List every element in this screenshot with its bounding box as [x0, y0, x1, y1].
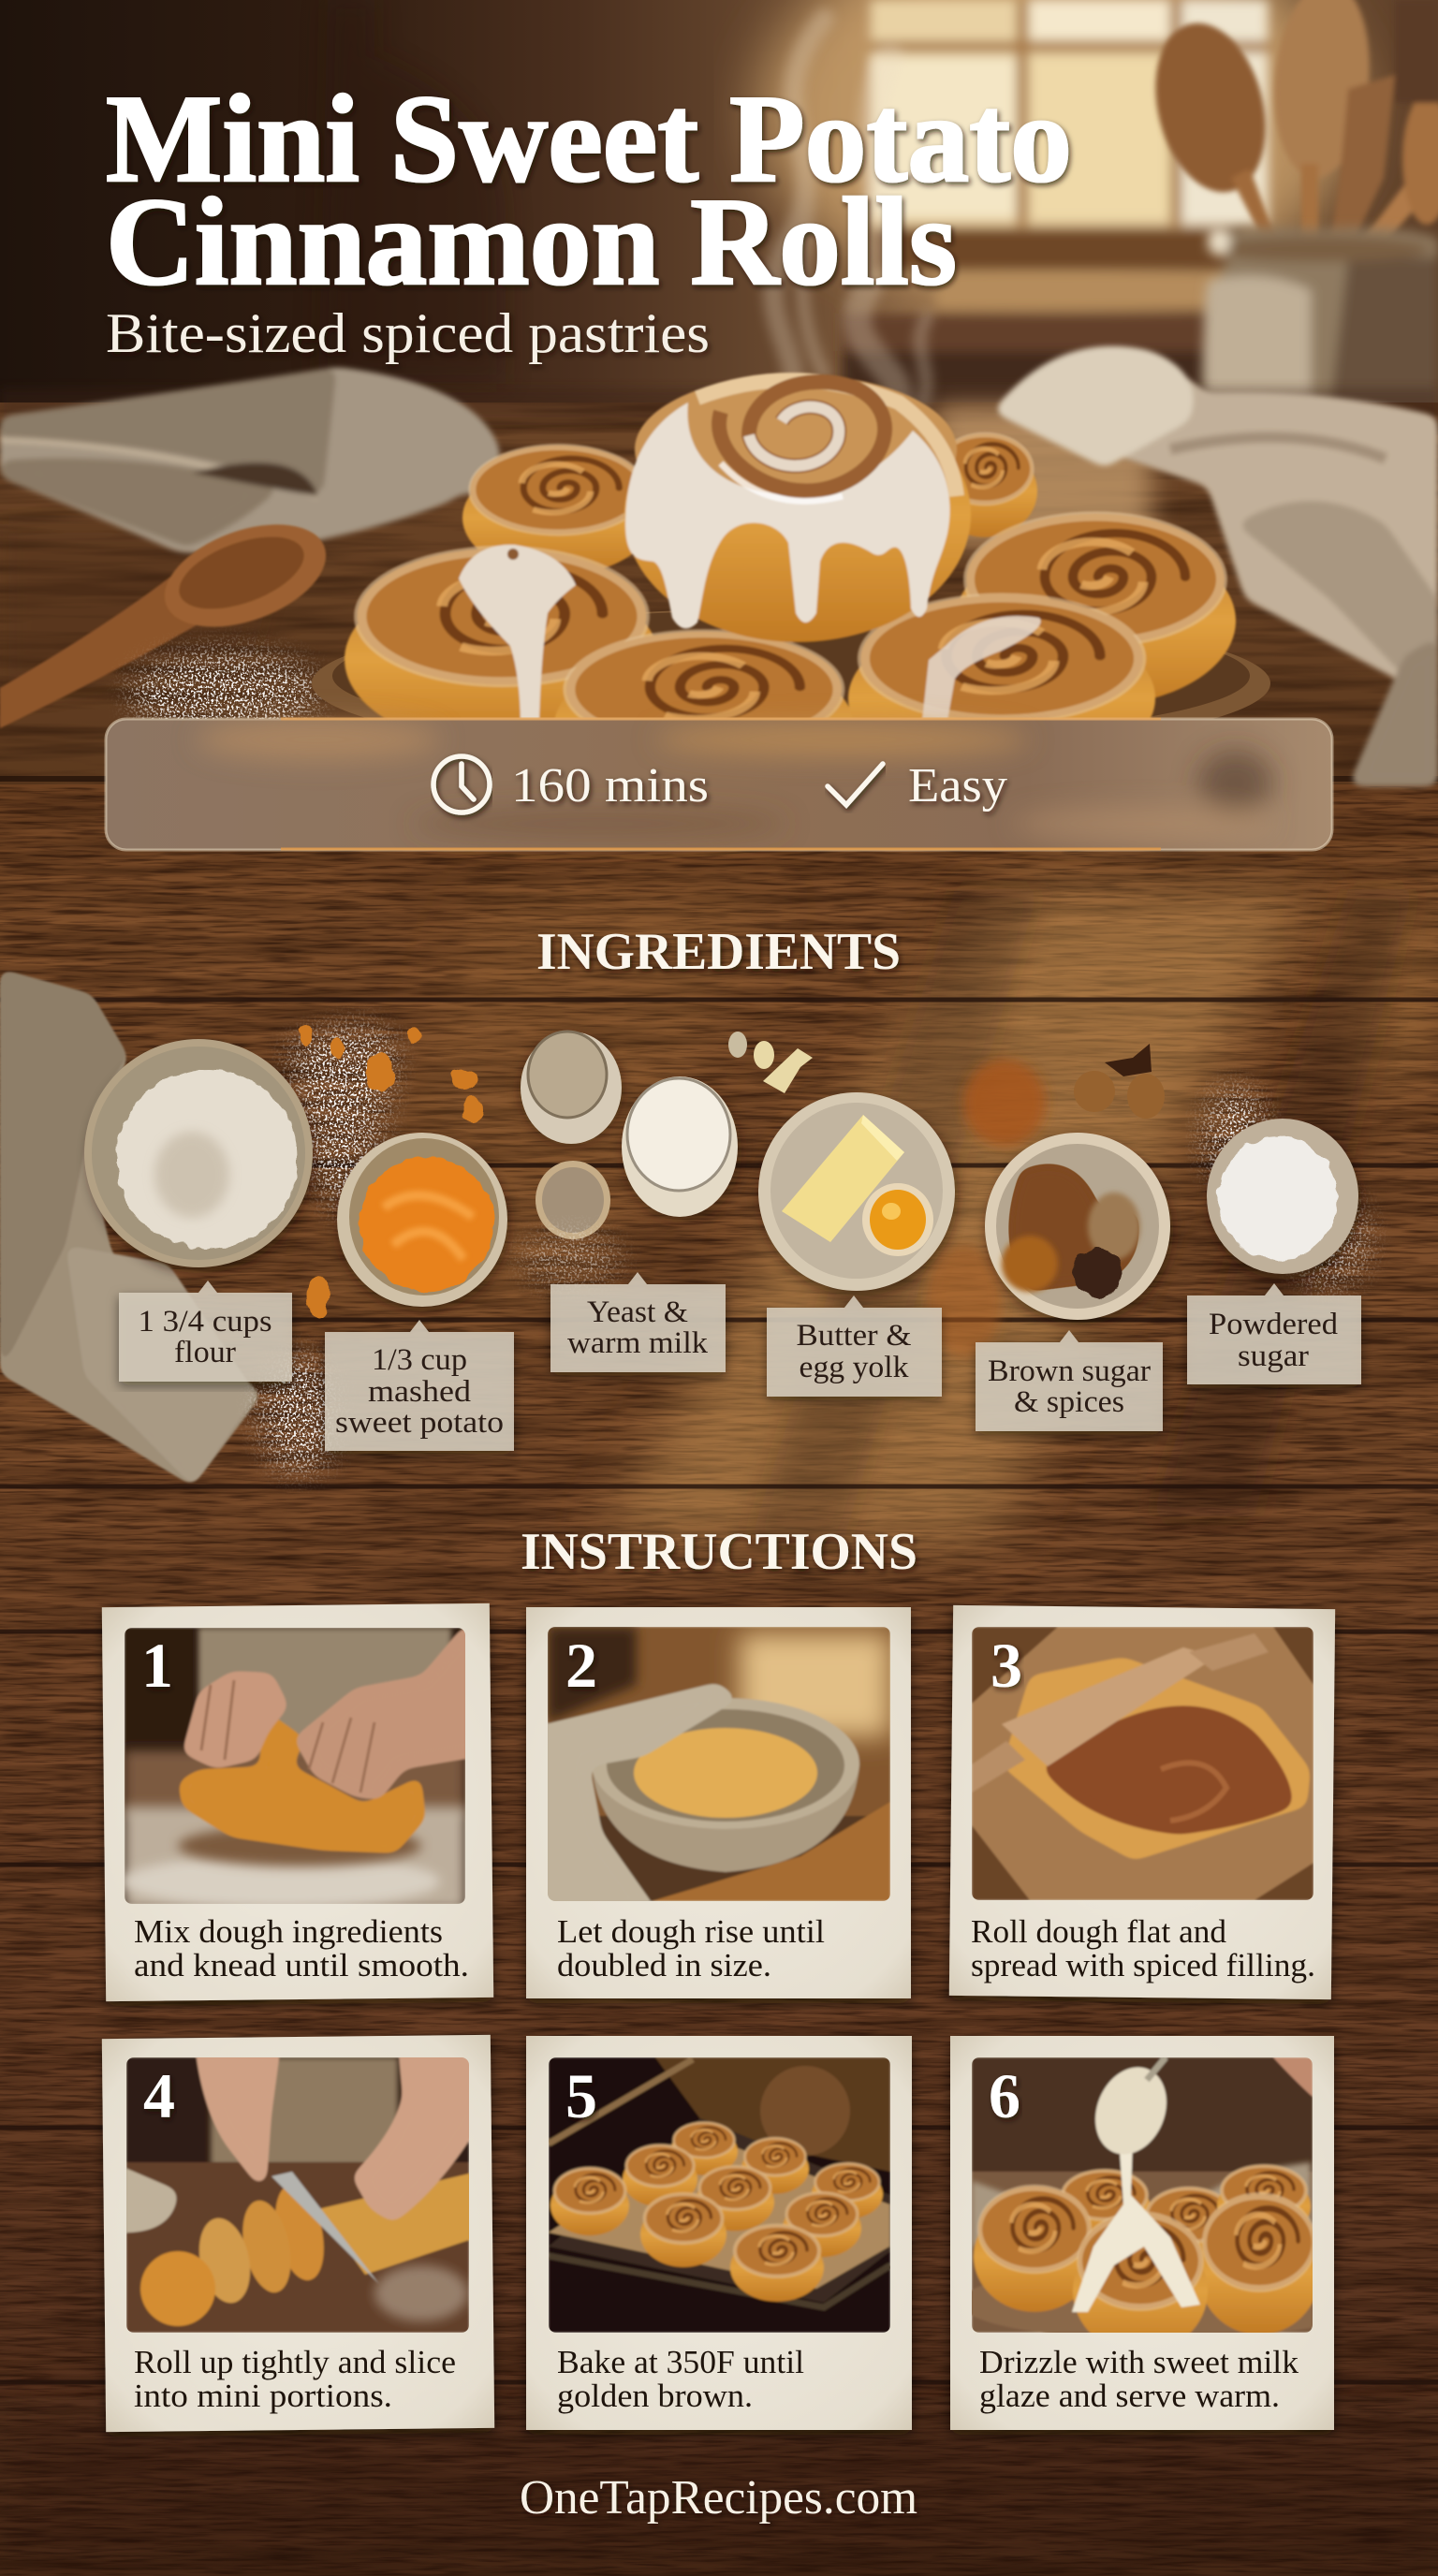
panel: ingredients	[0, 969, 1367, 1486]
linen towel	[0, 969, 262, 1486]
step text 6: glaze and serve warm.	[979, 2378, 1280, 2414]
heading: ingredients: INGREDIENTS	[536, 923, 901, 981]
step text 5: golden brown.	[557, 2378, 753, 2414]
label: powdered sugar: sugar	[1238, 1339, 1309, 1373]
bowl: flour	[84, 1039, 313, 1273]
step number 2: 2	[565, 1630, 597, 1701]
bowl: sweet potato	[337, 1133, 509, 1311]
step text 4: into mini portions.	[134, 2378, 392, 2414]
title	[106, 69, 1072, 311]
label: butter and egg: Butter &	[796, 1319, 912, 1353]
label: sweet potato	[325, 1320, 514, 1451]
step text 6	[979, 2344, 1299, 2414]
step text 2: doubled in size.	[557, 1947, 771, 1983]
jar: yeast	[519, 1032, 624, 1146]
hero backdrop wall	[0, 0, 1438, 431]
step 4 card	[102, 2035, 494, 2432]
step 6 card	[950, 2036, 1362, 2430]
back-right roll	[932, 433, 1037, 537]
front-left roll	[345, 545, 659, 748]
stoneware jar	[1201, 227, 1438, 412]
icon: check	[828, 764, 883, 805]
spilled flour	[262, 1030, 1367, 1470]
step number 3: 3	[990, 1630, 1022, 1701]
step text 4: Roll up tightly and slice	[134, 2344, 456, 2380]
back-left roll	[462, 446, 653, 576]
step text 5: Bake at 350F until	[557, 2344, 804, 2380]
panel: instructions	[102, 1603, 1362, 2432]
cinnamon dust	[963, 1060, 1046, 1146]
step number 4: 4	[143, 2060, 175, 2131]
label: sweet potato: 1/3 cup	[372, 1343, 467, 1377]
spice smear	[927, 1245, 1002, 1357]
labels	[119, 1272, 1361, 1451]
label: butter and egg: egg yolk	[800, 1351, 909, 1384]
cook time: 160 mins	[511, 759, 709, 812]
front-center roll	[554, 631, 854, 801]
label: yeast and milk: Yeast &	[587, 1295, 688, 1329]
step 1 card	[102, 1603, 493, 2001]
title: Cinnamon Rolls	[106, 172, 957, 311]
step text 1: Mix dough ingredients	[134, 1913, 443, 1950]
subtitle: Bite-sized spiced pastries	[106, 302, 710, 364]
label: sweet potato: mashed	[368, 1375, 472, 1409]
icon: clock	[433, 756, 490, 812]
info bar	[106, 719, 1332, 850]
label: powdered sugar: Powdered	[1209, 1308, 1339, 1341]
glass panel	[106, 719, 1332, 850]
step text 4	[134, 2344, 456, 2414]
dish: yeast	[536, 1161, 610, 1239]
photo: kneading dough	[122, 1627, 477, 1910]
front-right roll	[848, 595, 1155, 781]
label: flour: flour	[174, 1336, 236, 1369]
step 2 card	[526, 1607, 911, 1998]
step 3 card	[949, 1605, 1335, 1999]
heading: instructions: INSTRUCTIONS	[521, 1523, 917, 1581]
photo: rolling dough	[972, 1627, 1313, 1900]
step text 1	[134, 1913, 469, 1983]
bar highlights	[197, 719, 1273, 839]
photo: oven tray	[549, 2057, 890, 2333]
window	[758, 0, 1357, 407]
rolls group	[345, 374, 1236, 801]
label: flour: 1 3/4 cups	[139, 1305, 271, 1339]
spilled flour	[131, 653, 318, 732]
label: powdered sugar	[1187, 1283, 1361, 1384]
sweet potato crumbs	[298, 1023, 483, 1317]
glass: milk	[622, 1076, 741, 1222]
label: sugar and spices	[976, 1330, 1163, 1431]
plate	[312, 608, 1270, 758]
cutting board silhouette	[318, 0, 506, 384]
plate: butter and egg yolk	[758, 1092, 958, 1296]
step text 6: Drizzle with sweet milk	[979, 2344, 1299, 2380]
label: flour	[119, 1281, 292, 1382]
step text 3: spread with spiced filling.	[971, 1947, 1315, 1983]
nutmeg and cloves	[1074, 1044, 1165, 1119]
step text 2	[557, 1913, 825, 1983]
step number 5: 5	[565, 2060, 597, 2131]
bowl: brown sugar and spices	[985, 1133, 1173, 1325]
label: sugar and spices: Brown sugar	[988, 1354, 1151, 1388]
left linen towel	[0, 367, 500, 553]
big center roll	[624, 374, 971, 642]
label: yeast and milk	[550, 1272, 726, 1372]
bowl: powdered sugar	[1207, 1119, 1361, 1280]
right roll	[955, 514, 1236, 706]
hero photo: rolls on plate	[0, 0, 1438, 801]
step number 6: 6	[989, 2060, 1020, 2131]
step number 1: 1	[141, 1630, 173, 1701]
step 5 card	[526, 2036, 912, 2430]
footer: website: OneTapRecipes.com	[520, 2471, 917, 2525]
step text 2: Let dough rise until	[557, 1913, 825, 1950]
label: sweet potato: sweet potato	[335, 1406, 504, 1440]
step text 3: Roll dough flat and	[971, 1913, 1227, 1950]
step text 5	[557, 2344, 804, 2414]
title: Mini Sweet Potato	[106, 69, 1072, 208]
wooden spoons in jar	[1138, 0, 1438, 253]
difficulty: Easy	[908, 759, 1007, 812]
yeast dust	[522, 1235, 620, 1283]
label: sugar and spices: & spices	[1014, 1385, 1124, 1419]
photo: dough in bowl	[534, 1627, 890, 1914]
right linen towel	[992, 346, 1438, 786]
photo: slicing roll	[112, 2045, 482, 2333]
butter chips	[728, 1032, 813, 1093]
step text 3	[971, 1913, 1315, 1983]
photo: drizzling glaze	[960, 2056, 1362, 2353]
label: yeast and milk: warm milk	[567, 1326, 709, 1360]
step text 1: and knead until smooth.	[134, 1947, 469, 1983]
steam	[773, 19, 927, 402]
table top	[0, 402, 1438, 784]
label: butter and egg	[767, 1295, 942, 1397]
wooden spoon on table	[0, 505, 340, 728]
